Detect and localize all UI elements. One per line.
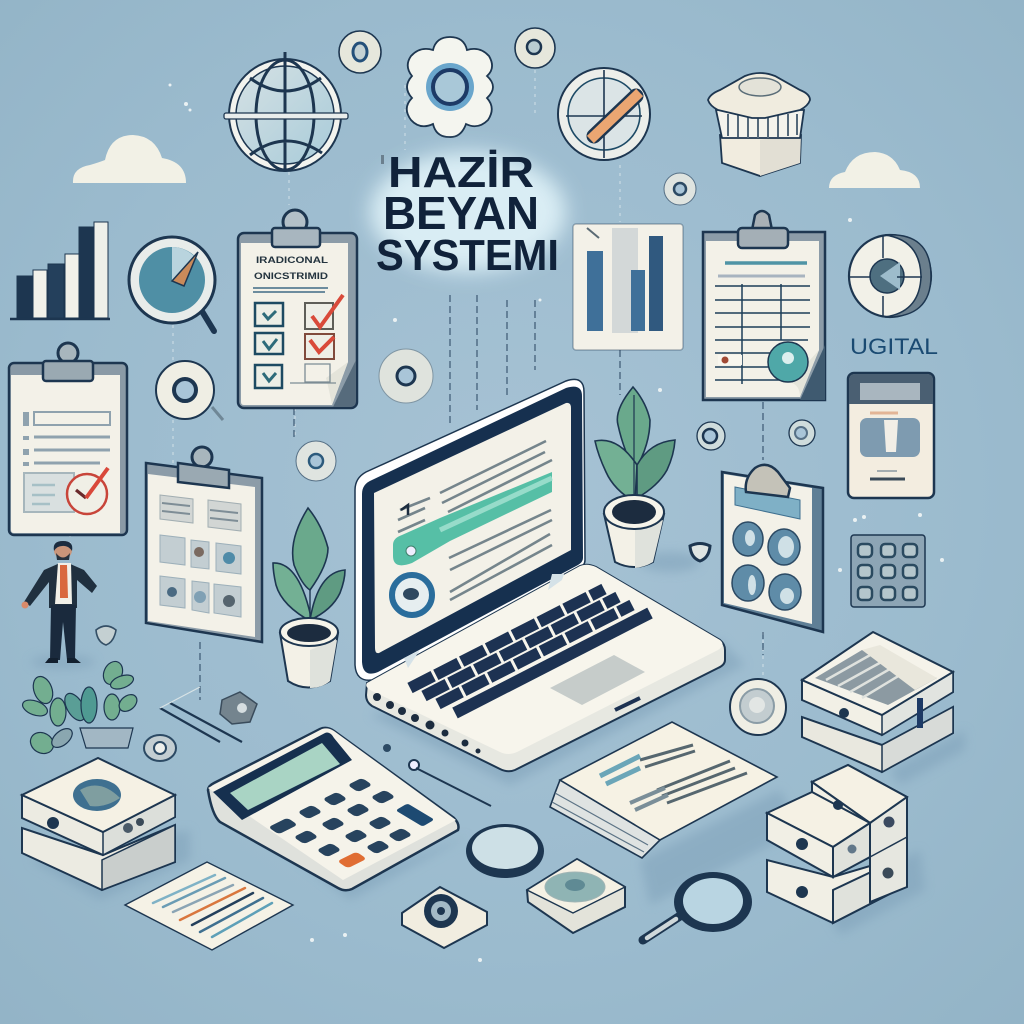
red checks	[305, 295, 343, 359]
clip	[738, 211, 788, 248]
clip	[272, 210, 320, 247]
checkboxes	[255, 303, 283, 388]
panel: gallery clipboard	[146, 447, 262, 642]
ports	[373, 693, 480, 754]
device: eye box	[527, 859, 625, 933]
title: HAZİR	[388, 148, 534, 197]
icon: small circle top left	[339, 31, 381, 73]
form title: IRADICONAL	[256, 255, 329, 265]
laptop	[355, 379, 725, 771]
form title: ONICSTRIMID	[254, 271, 329, 281]
label: digital: UGITAL	[850, 334, 938, 359]
background specks	[168, 84, 944, 962]
icon: ring near plant	[697, 422, 725, 450]
screen text lines	[398, 441, 552, 600]
icon: ring chart	[849, 235, 931, 317]
panel: table clipboard	[703, 211, 825, 400]
document stack top right	[802, 632, 953, 772]
device: small	[402, 887, 487, 948]
box stack bottom right	[767, 765, 907, 923]
icon: gear	[407, 37, 493, 137]
icon: cloud right	[829, 152, 920, 188]
soft floor shadows	[30, 552, 965, 935]
icon: globe	[224, 52, 348, 172]
hinges	[404, 574, 564, 668]
plant right	[595, 387, 675, 568]
figure: businessman	[22, 541, 97, 663]
server box left	[22, 758, 175, 890]
icon: cloud left	[73, 135, 186, 183]
title	[370, 148, 566, 280]
icon: ring right	[789, 420, 815, 446]
paper stack	[550, 722, 777, 858]
trackpad	[550, 655, 645, 705]
teal bar	[393, 472, 552, 565]
clip	[746, 465, 790, 497]
icon: small heart tag	[690, 544, 710, 561]
panel: checklist clipboard	[238, 210, 357, 408]
foliage	[20, 658, 140, 758]
icon: ring near compass	[664, 173, 696, 205]
plant left	[273, 508, 345, 688]
icon: ring below checklist	[296, 441, 336, 481]
form title	[254, 255, 329, 281]
document bottom	[125, 862, 293, 950]
title: SYSTEMI	[376, 231, 559, 280]
lens	[466, 824, 544, 878]
isometric small parts	[144, 687, 257, 761]
panel: keypad clipboard	[722, 465, 823, 632]
panel: phone card	[848, 373, 934, 498]
icon: cylinder stamp	[708, 73, 810, 176]
icon: ring centre	[379, 349, 433, 403]
magnifier	[643, 872, 752, 940]
icon: ring left	[156, 361, 223, 420]
title: BEYAN	[383, 187, 539, 239]
icon: small circle top right	[515, 28, 555, 68]
icon: disc right	[730, 679, 786, 735]
panel: check clipboard left	[9, 343, 127, 535]
bar chart	[10, 222, 110, 319]
icon: compass	[558, 68, 650, 160]
keyboard	[410, 589, 632, 704]
clip	[43, 343, 93, 381]
screen lid	[355, 379, 585, 680]
panel: bar chart card	[573, 224, 683, 350]
icon: keypad	[851, 535, 925, 607]
icon: magnifier with dial	[129, 237, 215, 331]
clip	[178, 447, 229, 488]
calculator	[208, 728, 458, 890]
icon: small leaf mark	[96, 626, 116, 645]
base	[366, 565, 725, 771]
pin	[383, 744, 491, 806]
